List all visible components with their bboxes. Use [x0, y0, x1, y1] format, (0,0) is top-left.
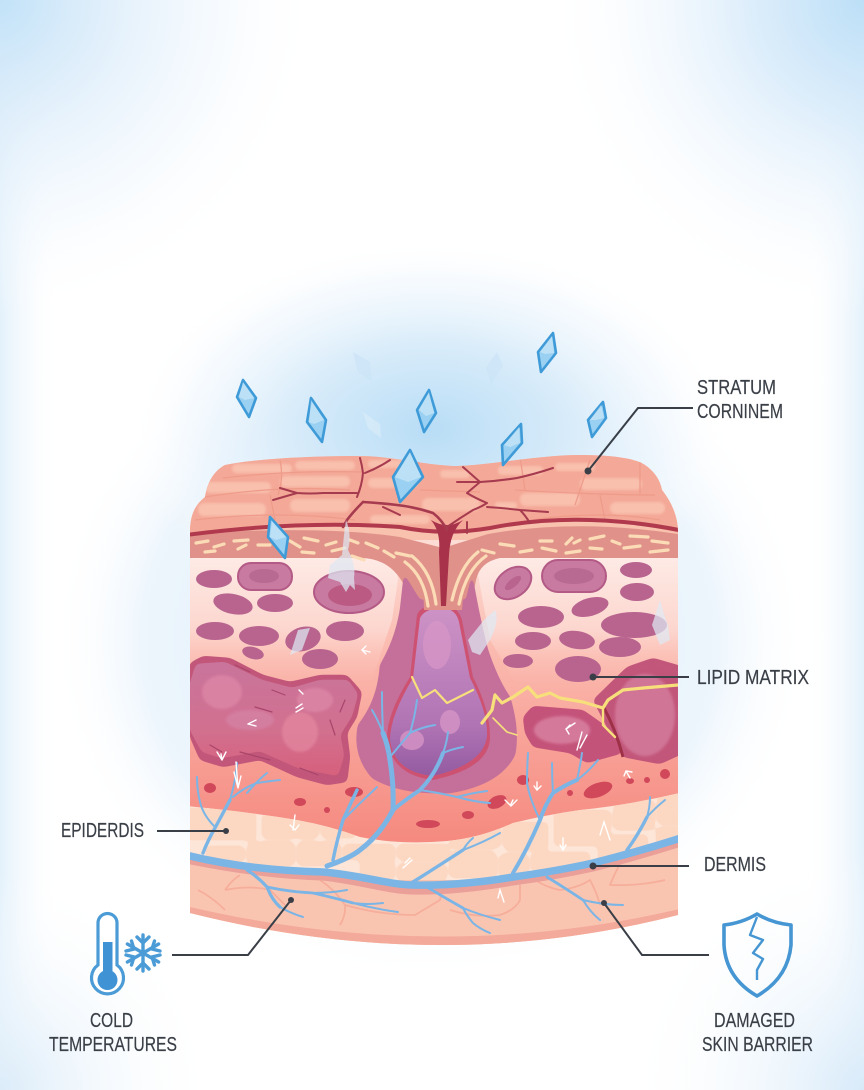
- icon: damaged shield: [724, 914, 791, 996]
- dermis base layer: [185, 450, 685, 980]
- bottom rim: [190, 907, 678, 945]
- main vein trunk: [186, 837, 684, 885]
- large purple cell left: [186, 656, 362, 785]
- follicle nuclei: [400, 621, 460, 750]
- dark band under corneum: [186, 520, 684, 535]
- crystal 8: [268, 517, 288, 558]
- large cell inner: [188, 662, 358, 776]
- label: dermis: DERMIS: [704, 854, 766, 876]
- crystal facets: [239, 336, 604, 540]
- lower cell lines: [198, 864, 665, 926]
- crystal 1: [237, 380, 256, 417]
- label: damaged skin barrier: [702, 1010, 813, 1056]
- corneum cell lines: [195, 457, 660, 520]
- small blood spots: [204, 769, 670, 828]
- label: stratum corninem: CORNINEM: [697, 401, 783, 423]
- label: stratum corninem: [584, 377, 783, 474]
- cream layer (epidermis cells): [190, 793, 678, 880]
- surface cracks: [273, 458, 553, 533]
- vein shadow: [186, 841, 684, 890]
- crease in right cell: [603, 706, 623, 757]
- lipid band: [190, 526, 678, 600]
- lower right cell: [523, 706, 623, 763]
- right cells: [593, 658, 684, 764]
- label: lipid matrix: LIPID MATRIX: [697, 667, 809, 689]
- large cell membrane dashes: [210, 665, 345, 775]
- label: stratum corninem: STRATUM: [697, 377, 776, 399]
- hair follicle outer: [357, 574, 517, 793]
- label: lipid matrix: [590, 667, 809, 689]
- large cell nuclei: [202, 675, 333, 752]
- icon: snowflake: [126, 935, 160, 971]
- label: cold temperatures: TEMPERATURES: [49, 1034, 177, 1056]
- lipid matrix cells: [196, 560, 667, 682]
- light panel: right: [478, 558, 678, 659]
- leader: damaged skin barrier: [601, 900, 709, 955]
- label: dermis: [590, 854, 766, 876]
- faint ghost crystals: [353, 352, 503, 438]
- vein branches: [197, 692, 665, 933]
- crystal 5: [588, 402, 606, 437]
- label: epiderdis: [61, 820, 229, 842]
- crystal 7 large: [393, 450, 423, 502]
- crystal 2: [307, 398, 326, 442]
- label: cold temperatures: COLD: [90, 1010, 133, 1032]
- icon: thermometer: [91, 914, 124, 994]
- follicle purple core: [390, 608, 487, 776]
- crystal 6: [502, 424, 522, 465]
- central crack stem: [431, 520, 463, 606]
- label: damaged skin barrier: SKIN BARRIER: [702, 1034, 813, 1056]
- leader: cold temperatures: [172, 897, 294, 955]
- ice crystals: [237, 333, 606, 558]
- lipid band cream streaks: [196, 536, 668, 606]
- skin cross-section: [185, 450, 686, 980]
- right cell inner: [615, 674, 675, 756]
- follicle neck: [424, 600, 463, 610]
- crystal 4: [538, 333, 556, 372]
- label: cold temperatures: [49, 1010, 177, 1056]
- vapor wisps: [290, 520, 670, 655]
- dermis gradient: [185, 540, 685, 850]
- white arrows: [217, 646, 632, 902]
- light panel: left: [190, 558, 398, 659]
- lower dermis layer: [190, 848, 678, 945]
- crystal 3: [417, 390, 436, 432]
- corneum base: [186, 450, 684, 534]
- yellow cracks: [412, 677, 678, 737]
- label: damaged skin barrier: DAMAGED: [714, 1010, 795, 1032]
- corneum cells: [198, 460, 665, 524]
- follicle red lining: [387, 604, 490, 780]
- lower right nuclei: [534, 716, 590, 744]
- label: epiderdis: EPIDERDIS: [61, 820, 144, 842]
- blue veins: [186, 692, 684, 933]
